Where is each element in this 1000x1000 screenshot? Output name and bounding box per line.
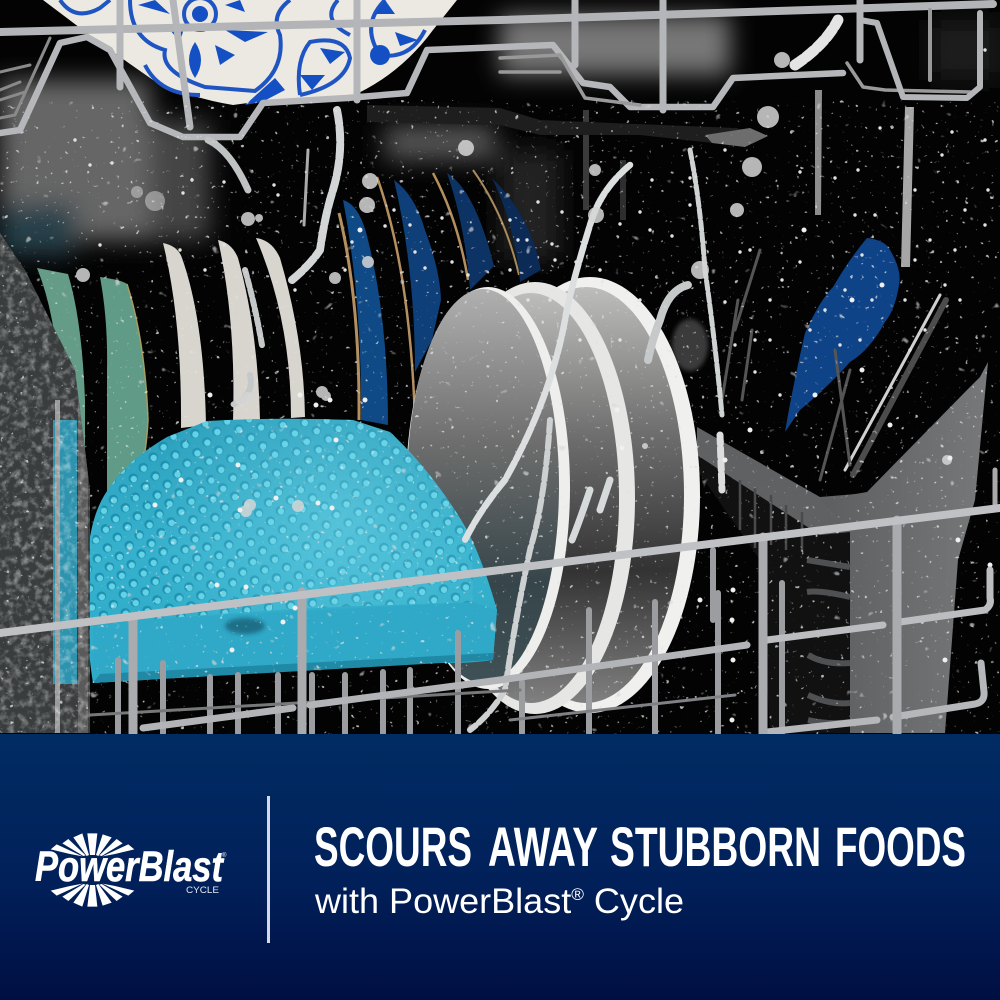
water streams (208, 20, 838, 730)
tub wall haze (0, 15, 1000, 260)
turquoise bowl (86, 419, 497, 683)
cutlery (672, 250, 946, 480)
headline: SCOURS (314, 815, 472, 878)
fine water spray (0, 100, 1000, 734)
large soft droplets (76, 52, 952, 517)
glass tumbler (0, 230, 90, 735)
subheading: Cycle (584, 881, 684, 921)
back plates: navy and gold (339, 170, 541, 425)
logo wordmark: PowerBlast (35, 843, 224, 891)
logo burst rays (51, 833, 134, 907)
lower dish rack (0, 470, 1000, 733)
cutlery basket (697, 362, 988, 733)
blue spatula (785, 238, 900, 432)
caption band (0, 734, 1000, 1000)
tub wall pillars (583, 90, 914, 267)
logo CYCLE label: CYCLE (186, 885, 219, 896)
headline (314, 815, 966, 878)
top plate with blue pattern (43, 0, 457, 105)
headline: AWAY (488, 815, 598, 878)
headline: STUBBORN (610, 815, 821, 878)
subheading: with PowerBlast (315, 881, 568, 921)
divider (267, 796, 270, 943)
photo: dishwasher interior (0, 0, 1000, 735)
PowerBlast logo (35, 833, 227, 907)
three dinner plates (406, 277, 700, 714)
back plates: white (163, 238, 305, 428)
logo registered mark: ® (222, 852, 227, 859)
lower spray arm (367, 105, 768, 147)
back plates: green (37, 268, 148, 497)
upper dish rack (0, 0, 993, 137)
subheading: ® (571, 885, 584, 904)
small droplets (75, 50, 990, 720)
